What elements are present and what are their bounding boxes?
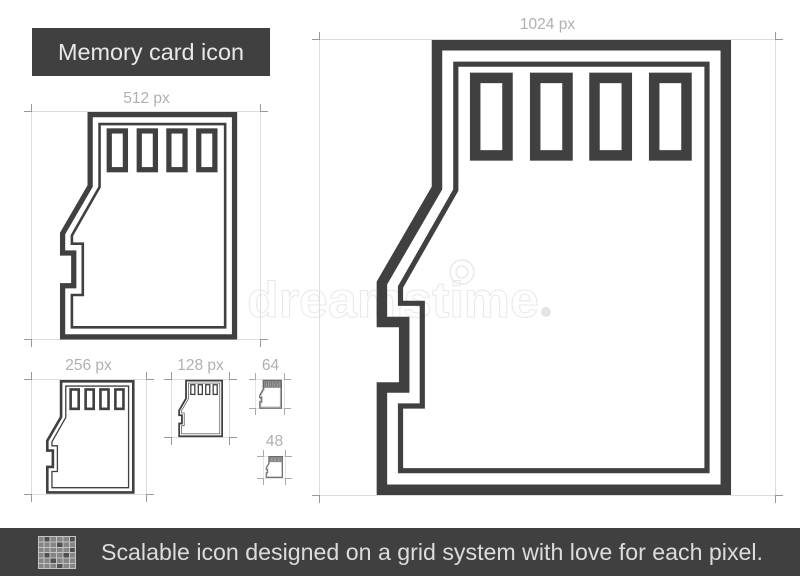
64 px label: 64 [262,357,279,374]
icon: pixel grid [38,536,76,569]
512 px corner ticks [24,104,268,347]
64 px size variant [249,357,291,415]
128 px size variant [164,357,237,445]
48 px corner ticks [257,450,292,485]
128 px icon [179,381,222,436]
512 px label: 512 px [123,90,170,107]
1024 px guides [320,40,776,496]
title banner [32,28,270,76]
256 px corner ticks [24,372,154,502]
48 px label: 48 [266,433,283,450]
48 px size variant [257,433,292,485]
64 px icon [260,380,282,408]
title banner: Memory card icon [58,39,244,65]
watermark: dreamstime [247,272,539,328]
512 px size variant [24,90,268,347]
128 px guides [172,380,230,438]
footer tagline: Scalable icon designed on a grid system with love for each pixel. [101,539,763,565]
256 px icon [47,381,133,492]
512 px icon [63,115,235,337]
footer bar [0,528,800,576]
1024 px label: 1024 px [520,16,575,33]
64 px corner ticks [249,373,291,415]
1024 px corner ticks [312,32,783,503]
128 px label: 128 px [177,357,224,374]
64 px guides [256,380,284,408]
256 px guides [32,380,146,494]
1024 px icon [382,45,726,490]
512 px guides [32,112,260,340]
256 px label: 256 px [65,357,112,374]
48 px guides [264,456,286,478]
48 px icon [266,456,283,477]
128 px corner ticks [164,372,237,445]
256 px size variant [24,357,154,502]
